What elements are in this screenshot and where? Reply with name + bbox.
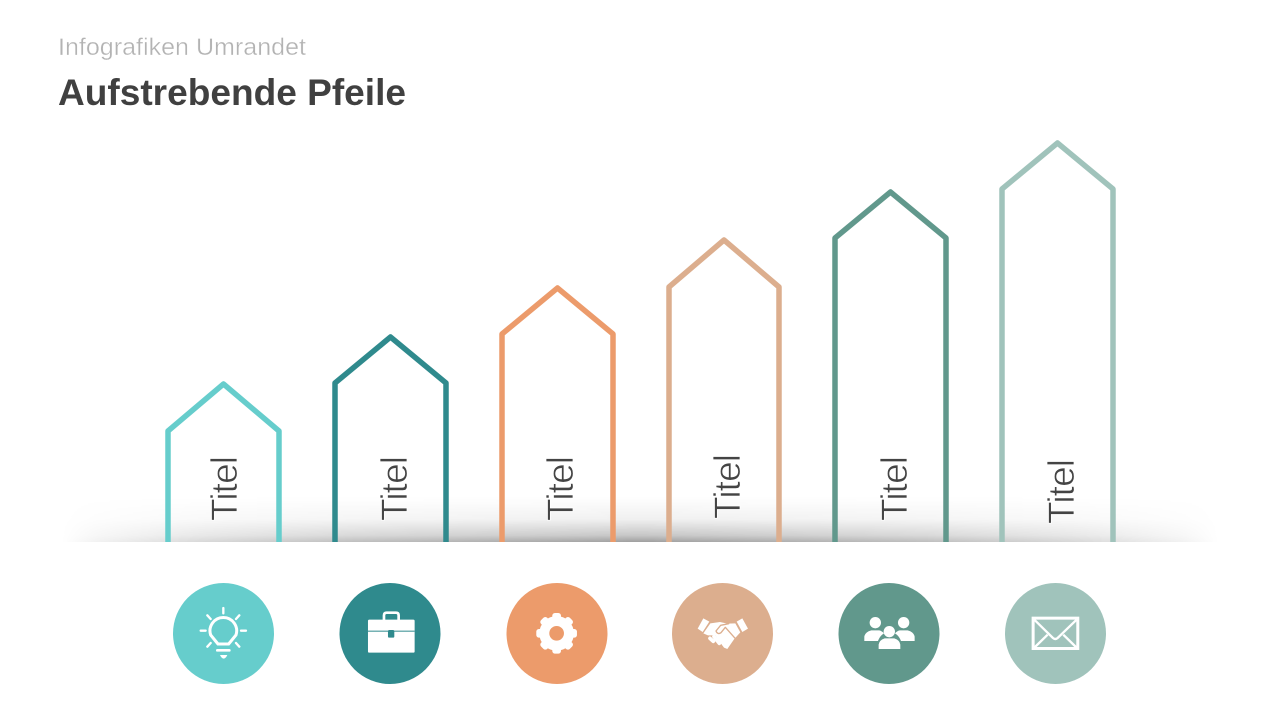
- arrow 5 label: Titel: [874, 456, 915, 521]
- arrow 1 label: Titel: [204, 456, 245, 521]
- title: Aufstrebende Pfeile: [58, 72, 406, 113]
- icon: handshake: [672, 583, 773, 684]
- icon: light bulb: [173, 583, 274, 684]
- icon: briefcase: [340, 583, 440, 684]
- arrow 4: [669, 240, 779, 542]
- subtitle: Infografiken Umrandet: [58, 34, 306, 61]
- arrow 3 label: Titel: [540, 456, 581, 521]
- icon: envelope: [1005, 583, 1106, 684]
- arrow 5: [835, 192, 946, 542]
- arrow 6: [1002, 143, 1113, 542]
- floor shadow: [85, 510, 1195, 542]
- arrow 1: [168, 384, 279, 542]
- arrow 2 label: Titel: [374, 456, 415, 521]
- arrow 4 label: Titel: [707, 454, 748, 519]
- arrow 3: [502, 288, 613, 542]
- arrow 6 label: Titel: [1041, 459, 1082, 524]
- icon: people: [838, 583, 940, 684]
- arrow 2: [335, 337, 446, 542]
- icon: gear: [506, 583, 608, 684]
